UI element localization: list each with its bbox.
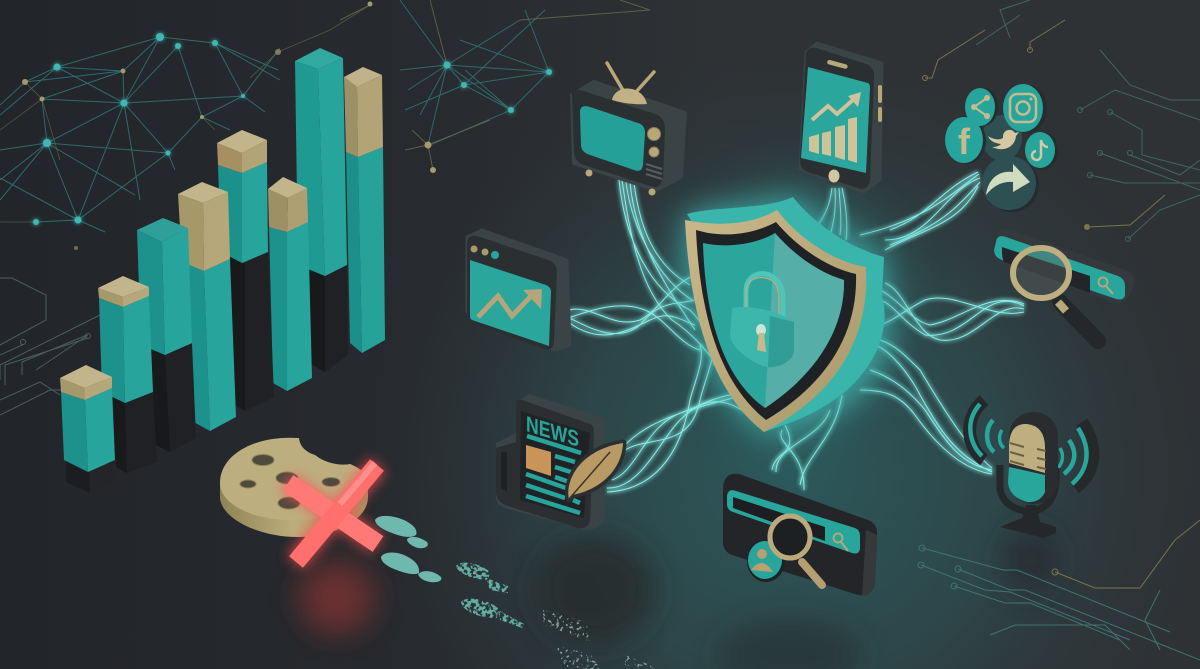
- icon: share circle: [965, 88, 998, 126]
- icon: instagram circle: [1003, 84, 1047, 133]
- stream: search bar to shield: [880, 283, 1024, 340]
- icon: browser window: [467, 230, 570, 350]
- network graph: upper left: [0, 5, 370, 250]
- shield inner rim: [696, 222, 856, 420]
- shield glow: [685, 197, 890, 432]
- stream: microphone to shield: [860, 340, 992, 474]
- red glow reflection: [299, 562, 375, 634]
- circuit traces: upper right: [922, 20, 1165, 230]
- icon: twitter circle: [982, 115, 1022, 161]
- icon: newspaper and quill: NEWS: [526, 411, 579, 452]
- icon: tiktok circle: [1025, 132, 1058, 170]
- bar 4: [178, 182, 236, 431]
- icon: search bar with magnifier: [993, 229, 1134, 341]
- bar 6: [268, 177, 312, 391]
- footprints: faint: [538, 608, 660, 669]
- icon: smartphone with chart: [800, 43, 882, 192]
- stream: bottom search to shield: [772, 395, 842, 490]
- icon: share arrow circle: [982, 156, 1039, 212]
- bar chart: [60, 48, 385, 493]
- shield: [670, 180, 901, 440]
- bar 1: [60, 365, 116, 493]
- sound waves right: [1058, 422, 1093, 488]
- stream: phone to shield: [818, 188, 847, 240]
- footprints: fading: [456, 563, 524, 628]
- user badge: [747, 540, 785, 582]
- footprints: solid: [375, 516, 441, 582]
- stream: television to shield: [619, 180, 730, 375]
- icon: bitten cookie: [220, 438, 368, 537]
- icon: quill: [568, 443, 623, 499]
- circuit traces: left: [0, 278, 100, 415]
- data streams: [563, 172, 1024, 492]
- network graph: upper centre: [340, 0, 650, 173]
- bar 7: [295, 48, 348, 372]
- bar 3: [137, 218, 196, 452]
- icon: facebook circle: f: [958, 121, 971, 162]
- circuit trace: lower right gold: [1052, 520, 1200, 588]
- icon: padlock: [730, 274, 794, 367]
- icon: profile search card: [723, 474, 877, 596]
- shield body side: [687, 197, 885, 432]
- bar 5: [217, 130, 274, 411]
- circuit traces: lower right: [918, 545, 1200, 660]
- sound waves left: [970, 400, 1004, 460]
- icon: podcast microphone: [970, 400, 1093, 538]
- stream: social media to shield: [860, 172, 980, 250]
- bar 8: [344, 67, 385, 353]
- shield inner face: [703, 233, 844, 408]
- icon: television: [572, 63, 685, 196]
- icon: newspaper and quill: [496, 394, 623, 530]
- circuit traces: far right: [976, 0, 1200, 242]
- stream: browser to shield: [563, 275, 700, 350]
- icon: social media cluster: [945, 84, 1058, 212]
- icon: red cross: [287, 463, 378, 562]
- stream: newspaper to shield: [607, 345, 750, 492]
- antenna: [607, 63, 654, 104]
- bar 2: [98, 276, 157, 473]
